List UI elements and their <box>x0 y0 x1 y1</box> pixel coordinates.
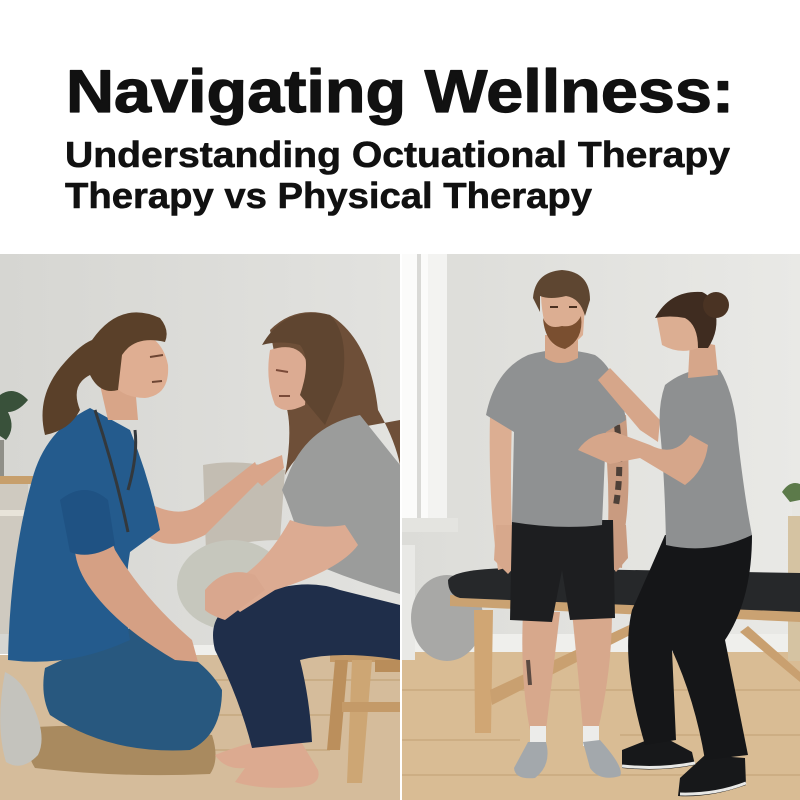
stethoscope <box>95 410 136 532</box>
panel: occupational therapy photo <box>0 254 400 800</box>
exercise ball <box>411 575 483 661</box>
hands on knee <box>205 572 265 620</box>
hand on patient <box>245 455 284 486</box>
plant <box>0 391 28 476</box>
leggings <box>628 535 752 760</box>
near arm <box>578 432 708 485</box>
eye and mouth <box>150 355 163 382</box>
panel gap <box>400 254 402 800</box>
white soles <box>622 763 746 794</box>
shoes <box>514 742 548 778</box>
neck <box>545 335 578 363</box>
subtitle line 1: Understanding Octuational Therapy <box>65 134 730 175</box>
knee tattoo <box>528 660 530 685</box>
shoe <box>0 672 42 766</box>
face <box>657 312 700 351</box>
shirt <box>282 415 400 594</box>
arm <box>215 520 358 612</box>
radiator <box>402 545 415 660</box>
window <box>402 254 458 532</box>
socks <box>530 726 546 746</box>
shoes <box>622 735 695 769</box>
scrub top <box>8 408 160 662</box>
floor <box>402 652 800 800</box>
patient in grey <box>205 312 400 788</box>
wall <box>0 254 400 654</box>
stool <box>327 642 400 783</box>
face <box>268 347 308 410</box>
beard <box>543 316 581 349</box>
long hair back <box>270 312 400 475</box>
therapist in grey <box>578 292 752 796</box>
panel: physical therapy photo <box>402 254 800 800</box>
navy jeans <box>213 584 400 748</box>
near arm <box>75 524 198 662</box>
hair <box>42 312 167 435</box>
face <box>541 292 585 346</box>
arms <box>490 415 516 570</box>
man <box>486 270 629 778</box>
legs <box>522 612 560 730</box>
far arm <box>598 368 660 442</box>
eye and mouth <box>276 370 290 396</box>
face <box>105 329 168 398</box>
therapist in blue <box>0 312 284 775</box>
hair and bun <box>655 292 716 348</box>
wall <box>402 254 800 654</box>
title line: Navigating Wellness: Navigating Wellness: <box>66 58 734 125</box>
side shelf and plant <box>782 483 800 661</box>
subtitle line 2: Therapy vs Physical Therapy <box>65 175 592 216</box>
knee pillow <box>28 726 216 775</box>
neck <box>100 385 138 420</box>
arm tattoo <box>616 425 619 505</box>
shorts <box>510 520 615 622</box>
neck <box>688 340 718 378</box>
floor <box>0 655 400 800</box>
cushions <box>177 462 287 630</box>
side shelf <box>0 476 33 634</box>
title <box>65 58 734 216</box>
shirt <box>486 350 626 527</box>
eyes <box>550 306 577 308</box>
shirt <box>660 369 752 548</box>
curly hair <box>533 270 590 316</box>
treatment table <box>448 568 800 733</box>
hands <box>494 525 519 574</box>
front hair <box>262 313 344 425</box>
trousers <box>43 628 222 751</box>
far arm <box>135 462 262 544</box>
feet <box>215 738 319 788</box>
